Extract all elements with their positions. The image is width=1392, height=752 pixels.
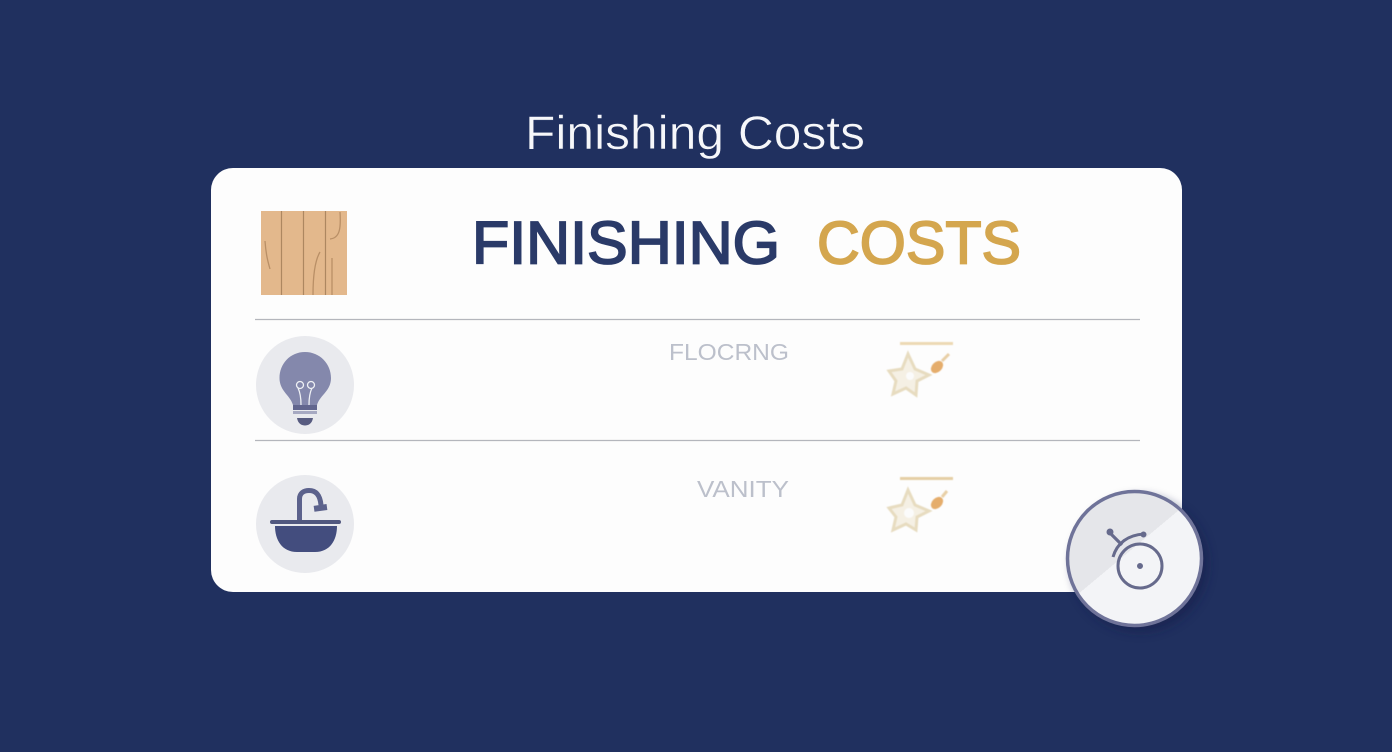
heading: finishing costs: FINISHING [472, 210, 780, 276]
icon: wood planks [261, 211, 347, 295]
icon: wheel [1108, 530, 1162, 588]
row label: flooring: FLOCRNG [669, 339, 789, 365]
icon: light bulb [256, 336, 354, 434]
row label: vanity: VANITY [697, 476, 789, 502]
panel: finishing costs card [211, 168, 1182, 592]
title: Finishing Costs [525, 106, 865, 159]
badge: wheel icon disc [1068, 492, 1208, 632]
icon: star and brush, flooring row [889, 342, 953, 395]
icon: vanity sink [256, 475, 354, 573]
heading: finishing costs: COSTS [817, 210, 1021, 276]
icon: star and brush, vanity row [889, 477, 953, 530]
heading: finishing costs [472, 210, 1021, 276]
